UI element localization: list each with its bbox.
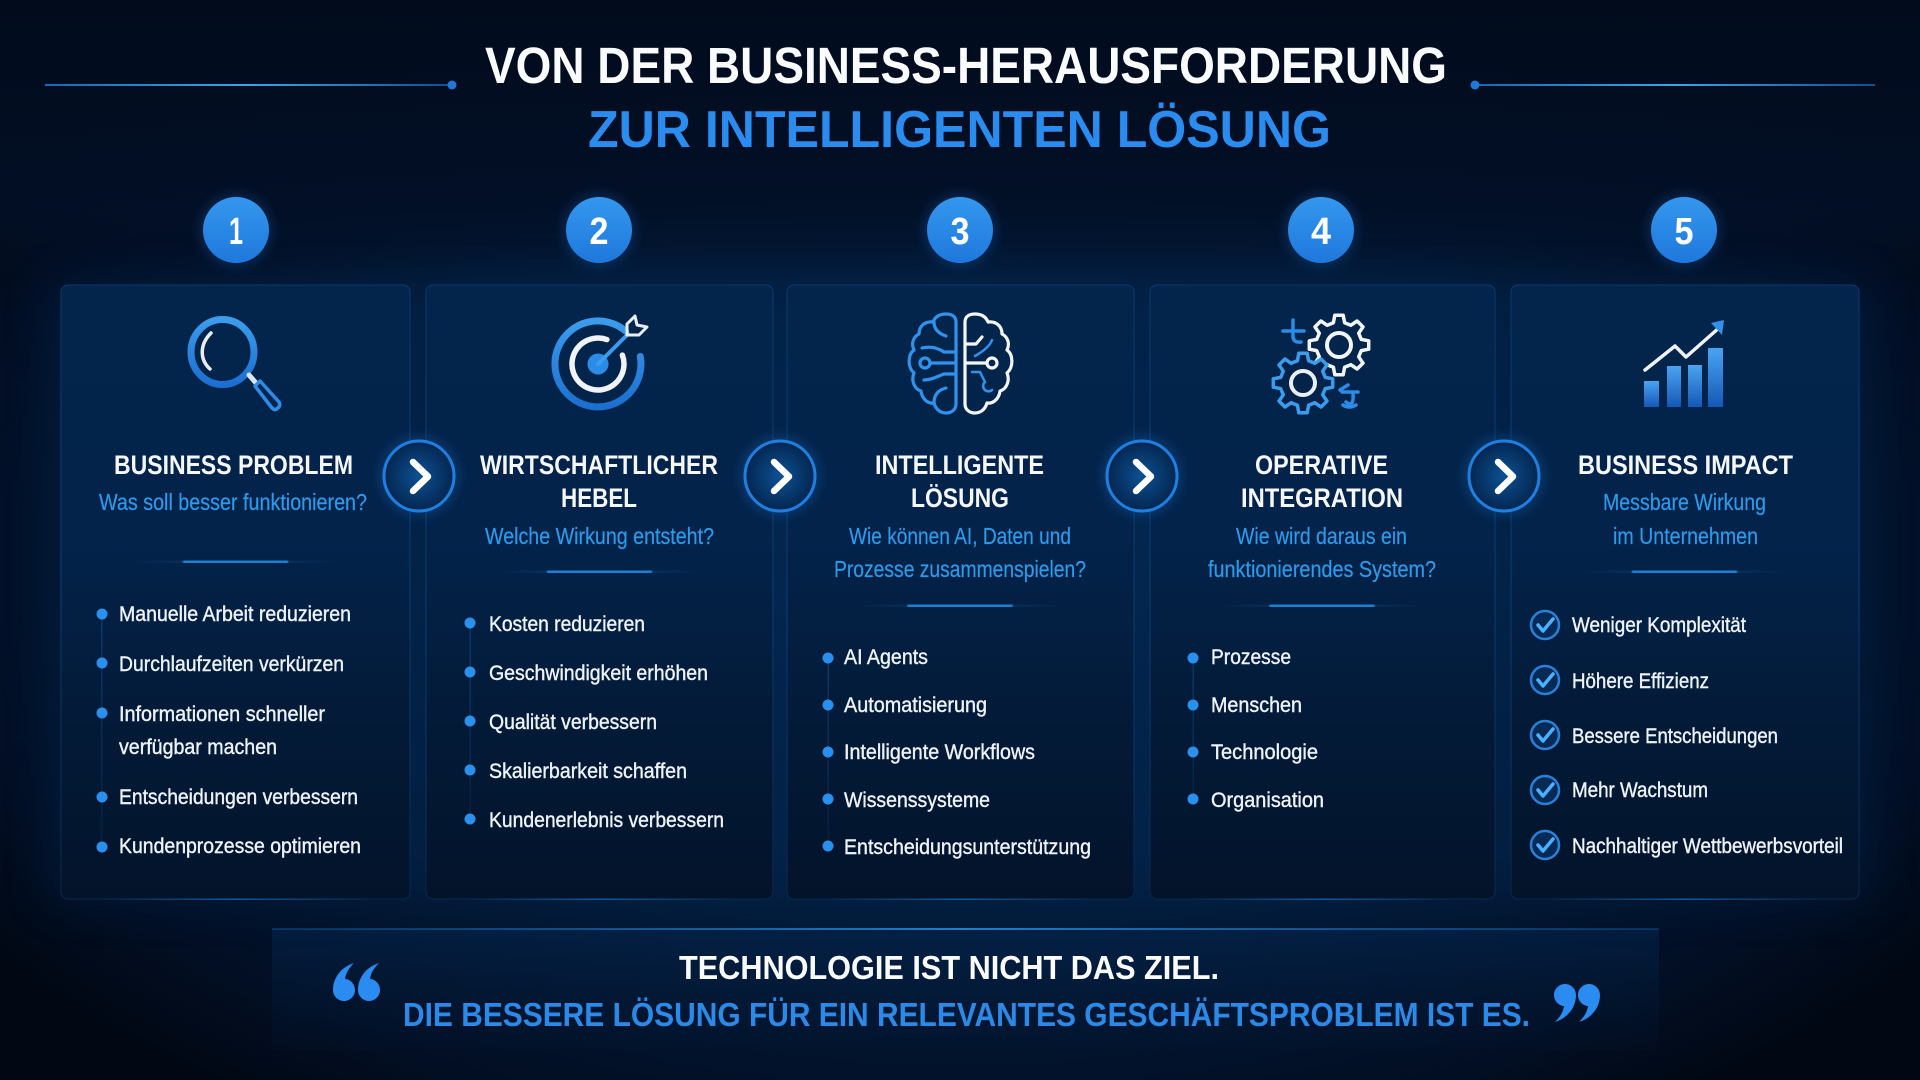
card 1 background bbox=[61, 285, 410, 899]
step badge 2 bbox=[563, 194, 635, 266]
list: verfügbar machen bbox=[119, 735, 277, 759]
list bbox=[822, 645, 1091, 859]
list: Kundenprozesse optimieren bbox=[119, 834, 361, 858]
list: Kosten reduzieren bbox=[489, 612, 645, 636]
subtitle bbox=[834, 523, 1086, 582]
heading bbox=[480, 450, 718, 513]
step badge 1: 1 bbox=[229, 211, 243, 253]
list: Durchlaufzeiten verkürzen bbox=[119, 652, 344, 676]
heading: INTEGRATION bbox=[1241, 483, 1403, 513]
icon: opening quotation mark bbox=[333, 963, 380, 1001]
icon: closing quotation mark bbox=[1554, 984, 1600, 1022]
card 2 background bbox=[426, 285, 773, 899]
list bbox=[1188, 645, 1324, 812]
list: Menschen bbox=[1211, 693, 1302, 717]
list: Entscheidungen verbessern bbox=[119, 785, 358, 809]
arrow 1 to 2 bbox=[380, 437, 458, 515]
list: Qualität verbessern bbox=[489, 710, 657, 734]
step badge 3 bbox=[924, 194, 996, 266]
list: Automatisierung bbox=[844, 693, 987, 717]
quote panel bbox=[272, 928, 1659, 1050]
icon: magnifying glass bbox=[191, 320, 280, 410]
list: Manuelle Arbeit reduzieren bbox=[119, 602, 351, 626]
subtitle: Prozesse zusammenspielen? bbox=[834, 556, 1086, 582]
subtitle bbox=[1603, 489, 1766, 549]
subtitle: Was soll besser funktionieren? bbox=[99, 489, 367, 515]
checklist: Nachhaltiger Wettbewerbsvorteil bbox=[1572, 834, 1843, 858]
panel: intelligente loesung bbox=[787, 285, 1134, 900]
checklist: Weniger Komplexität bbox=[1572, 613, 1746, 637]
step badge 1 bbox=[200, 194, 272, 266]
list: Prozesse bbox=[1211, 645, 1291, 669]
arrow 2 to 3 bbox=[741, 437, 819, 515]
heading: BUSINESS IMPACT bbox=[1578, 450, 1793, 480]
arrow 4 to 5 bbox=[1465, 437, 1543, 515]
heading bbox=[875, 450, 1044, 513]
subtitle: funktionierendes System? bbox=[1208, 556, 1436, 582]
subtitle: Welche Wirkung entsteht? bbox=[485, 523, 714, 549]
heading: LÖSUNG bbox=[911, 483, 1009, 513]
list: Organisation bbox=[1211, 788, 1324, 812]
icon: gears bbox=[1273, 315, 1369, 413]
list: Technologie bbox=[1211, 740, 1318, 764]
subtitle: Wie können AI, Daten und bbox=[849, 523, 1071, 549]
card 3 background bbox=[787, 285, 1134, 899]
step badge 2: 2 bbox=[590, 211, 608, 253]
icon: brain bbox=[909, 314, 1012, 413]
list: AI Agents bbox=[844, 645, 928, 669]
list bbox=[464, 612, 724, 832]
title bbox=[45, 37, 1875, 159]
panel: business problem bbox=[61, 285, 410, 900]
checklist: Mehr Wachstum bbox=[1572, 778, 1708, 802]
checklist bbox=[1531, 611, 1843, 859]
checklist: Höhere Effizienz bbox=[1572, 669, 1709, 693]
heading: BUSINESS PROBLEM bbox=[114, 450, 353, 480]
icon: target with arrow bbox=[555, 316, 647, 407]
arrow 3 to 4 bbox=[1103, 437, 1181, 515]
list: Entscheidungsunterstützung bbox=[844, 835, 1091, 859]
subtitle: im Unternehmen bbox=[1613, 523, 1758, 549]
step badge 5 bbox=[1648, 194, 1720, 266]
list: Intelligente Workflows bbox=[844, 740, 1035, 764]
quote line 2: DIE BESSERE LÖSUNG FÜR EIN RELEVANTES GESCHÄFTSPROBLEM IST ES. bbox=[403, 996, 1530, 1033]
step badge 4 bbox=[1285, 194, 1357, 266]
panel: operative integration bbox=[1150, 285, 1495, 900]
list: Informationen schneller bbox=[119, 702, 325, 726]
card 5 background bbox=[1511, 285, 1859, 899]
step badge 4: 4 bbox=[1311, 211, 1331, 253]
quote line 1: TECHNOLOGIE IST NICHT DAS ZIEL. bbox=[679, 949, 1219, 986]
panel: business impact bbox=[1511, 285, 1859, 900]
heading: WIRTSCHAFTLICHER bbox=[480, 450, 718, 480]
step badge 5: 5 bbox=[1674, 211, 1694, 253]
panel: wirtschaftlicher hebel bbox=[426, 285, 773, 900]
heading bbox=[1241, 450, 1403, 513]
list: Kundenerlebnis verbessern bbox=[489, 808, 724, 832]
heading: INTELLIGENTE bbox=[875, 450, 1044, 480]
heading: OPERATIVE bbox=[1255, 450, 1388, 480]
list: Geschwindigkeit erhöhen bbox=[489, 661, 708, 685]
list: Skalierbarkeit schaffen bbox=[489, 759, 687, 783]
heading: HEBEL bbox=[561, 483, 637, 513]
subtitle bbox=[1208, 523, 1436, 582]
title line 1: VON DER BUSINESS-HERAUSFORDERUNG bbox=[485, 37, 1447, 94]
subtitle: Wie wird daraus ein bbox=[1236, 523, 1407, 549]
icon: growth chart bbox=[1644, 320, 1724, 407]
list bbox=[96, 602, 361, 858]
check icons bbox=[1531, 611, 1559, 859]
list: Wissenssysteme bbox=[844, 788, 990, 812]
card 4 background bbox=[1150, 285, 1495, 899]
step badge 3: 3 bbox=[950, 211, 970, 253]
checklist: Bessere Entscheidungen bbox=[1572, 724, 1778, 748]
subtitle: Messbare Wirkung bbox=[1603, 489, 1766, 515]
title line 2: ZUR INTELLIGENTEN LÖSUNG bbox=[588, 101, 1331, 159]
